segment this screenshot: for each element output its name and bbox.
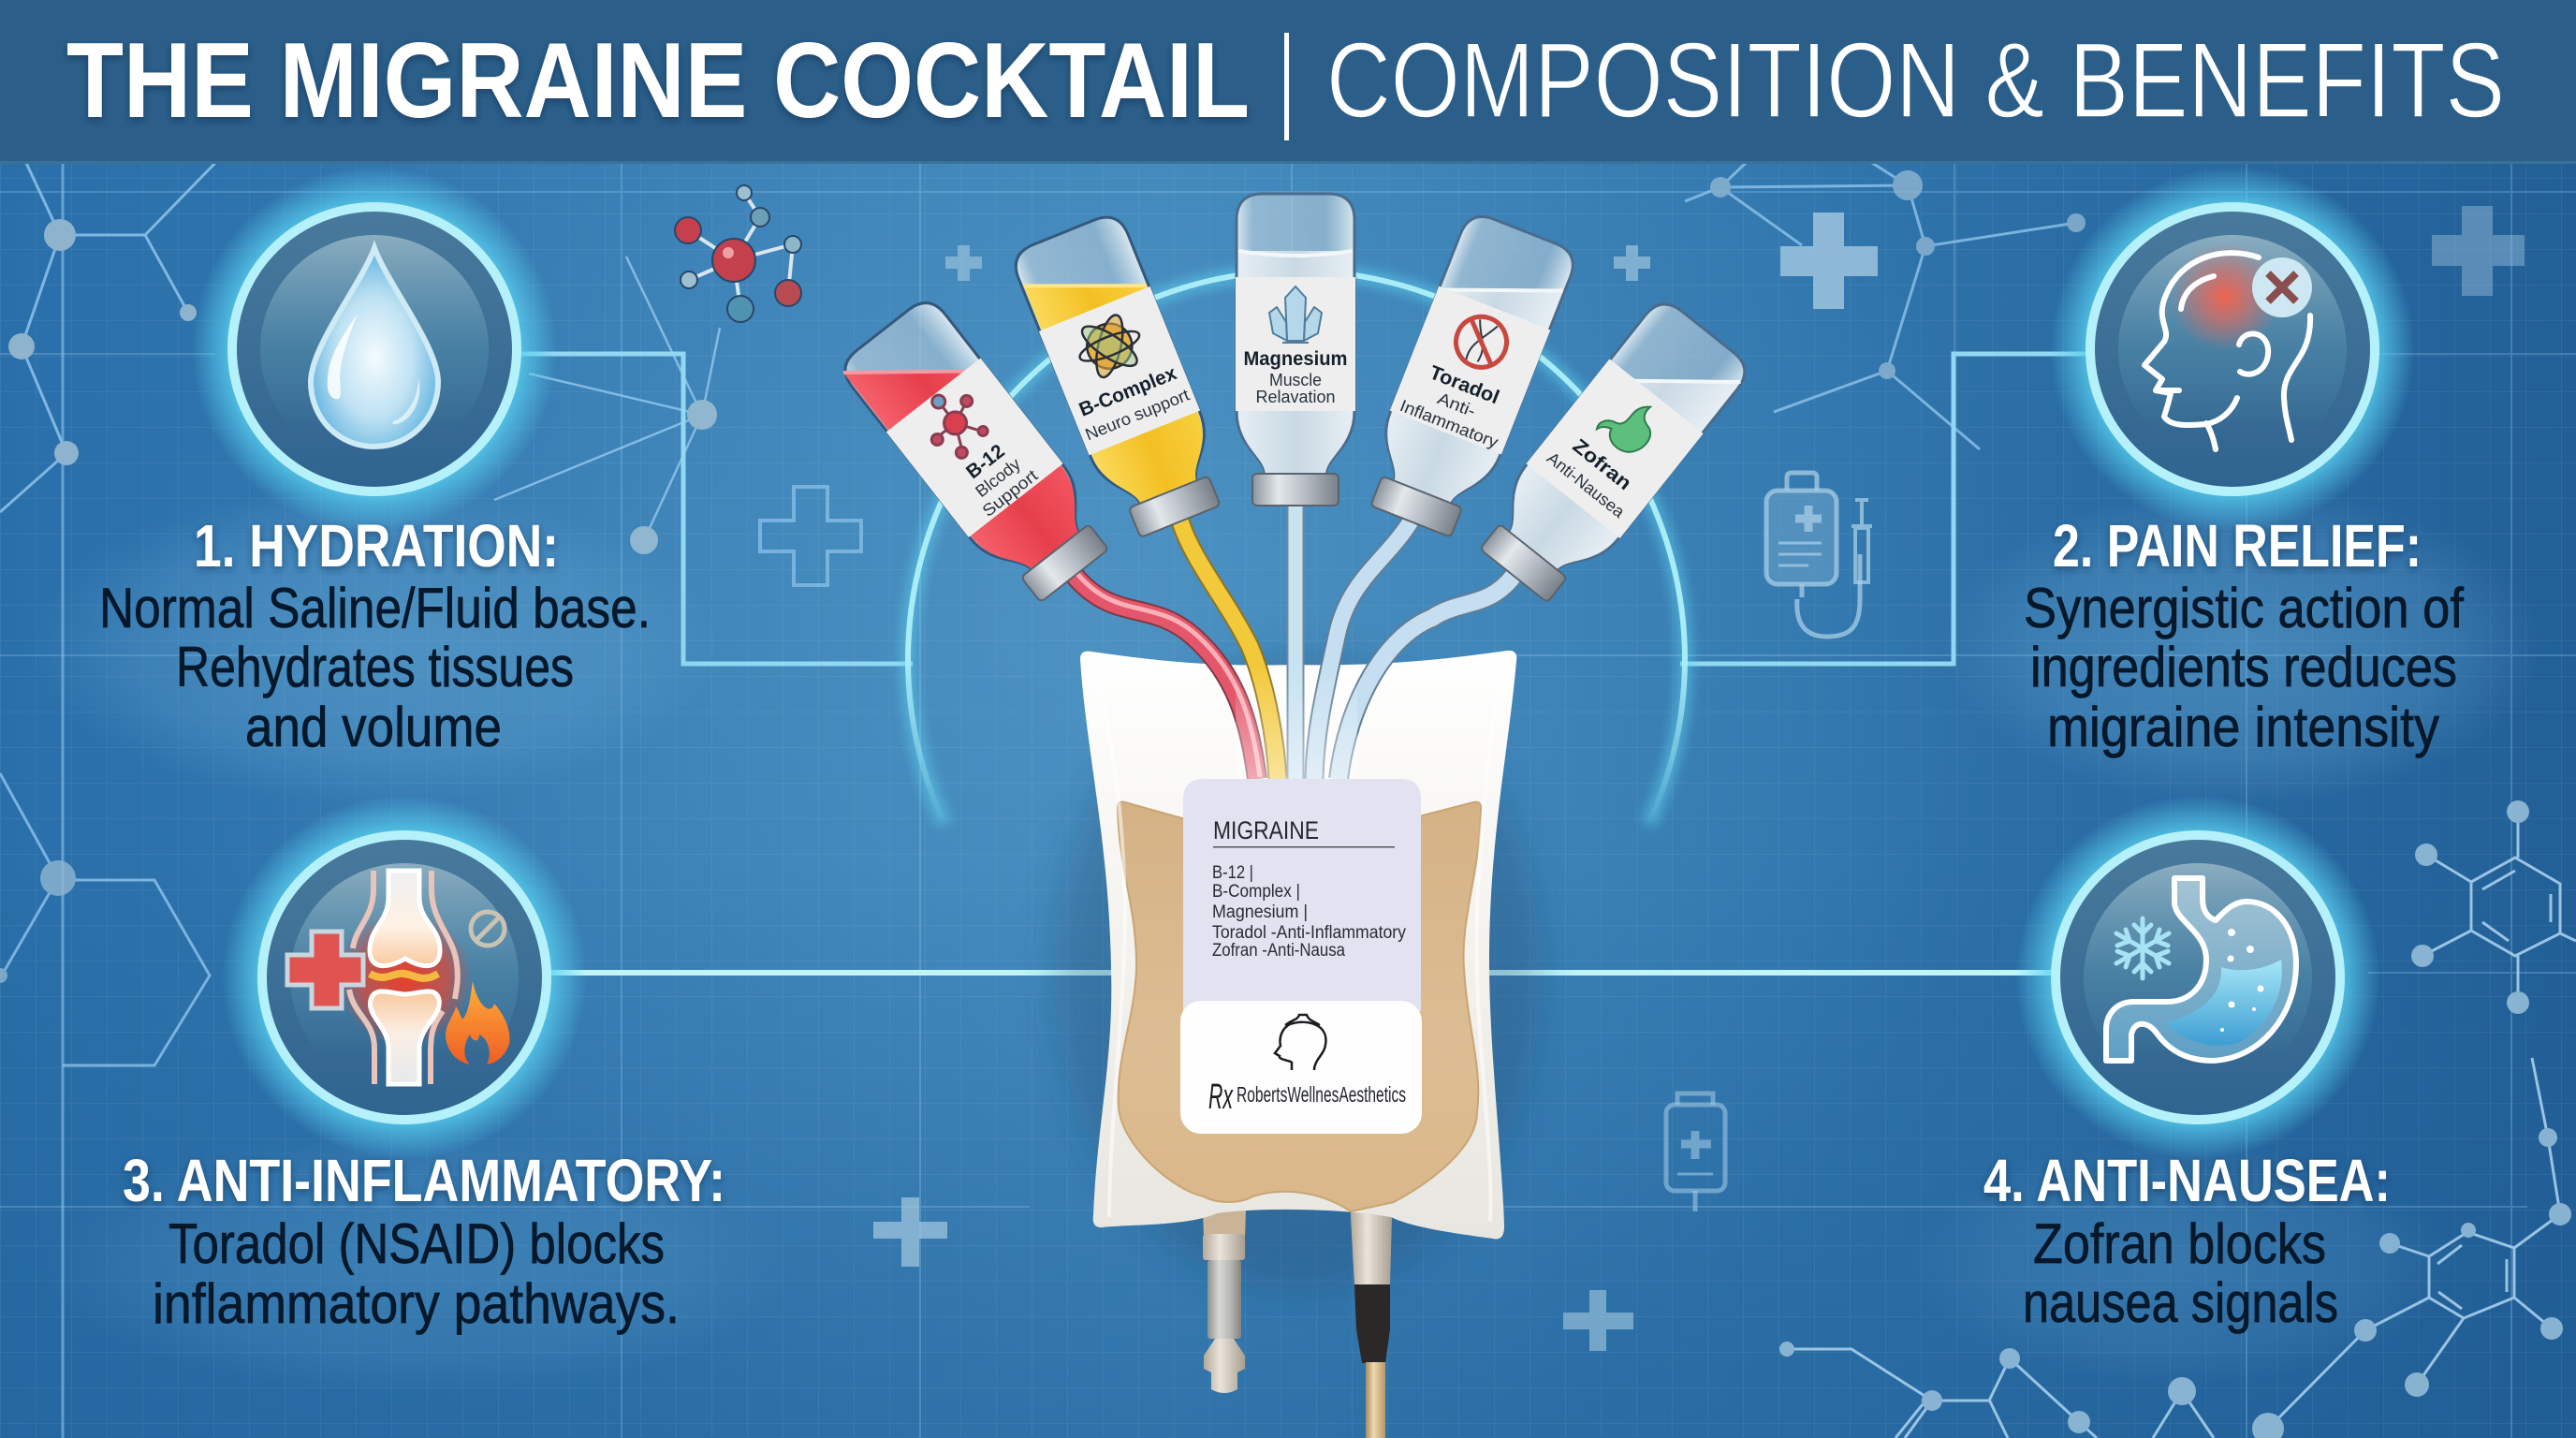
title [66,22,2505,140]
vial: toradol: Anti- [1435,389,1478,420]
label: composition: Toradol -Anti-Inflammatory [1212,923,1406,943]
bag ports [1202,1180,1392,1438]
tube veil inside bag [1236,667,1357,781]
icon: red molecule [911,379,998,467]
text: pain relief body: ingredients reduces [2030,636,2457,698]
text: hydration body [99,577,651,758]
text: pain relief body: Synergistic action of [2024,577,2464,639]
vial: b-12: B-12 [962,440,1009,483]
vial: b-12: Support [979,466,1041,521]
vial: zofran: Zofran [1569,435,1635,494]
text: anti-nausea body: nausea signals [2023,1271,2338,1334]
vial: magnesium [1236,194,1355,506]
vial: b-complex: Neuro support [1082,386,1192,444]
heading: hydration: 1. HYDRATION: [194,512,559,580]
panel: pain relief [2024,167,2464,758]
text: anti-inflammatory body: Toradol (NSAID) blocks [168,1212,665,1275]
panel: anti-nausea [1983,795,2391,1334]
label: composition: B-Complex | [1212,882,1300,902]
label: brand [1180,1001,1422,1134]
connector lines [521,354,2090,973]
label: composition: Zofran -Anti-Nausa [1212,941,1345,961]
icon: head outline [1275,1015,1325,1070]
icon: atom [1068,304,1151,389]
title: THE MIGRAINE COCKTAIL [66,22,1250,140]
icon: stomach with snowflake [2015,795,2380,1160]
tube: zofran clear [1339,576,1514,779]
label: composition: MIGRAINE [1213,816,1319,844]
tube: b-12 red [1075,574,1260,779]
vial: zofran: Anti-Nausea [1544,448,1629,522]
text: hydration body: Rehydrates tissues [176,636,574,698]
vial: magnesium: Magnesium [1243,348,1348,370]
text halos [28,487,2541,1395]
bag body [1080,651,1516,1239]
icon: crystal [1269,286,1322,343]
vial: magnesium: Muscle [1269,371,1322,389]
icon: molecule [675,185,801,322]
icon: small iv bottle [1666,1093,1725,1211]
text: hydration body: and volume [245,696,502,758]
central glow arc [908,271,1685,824]
label: brand: RobertsWellnesAesthetics [1237,1082,1406,1107]
text: anti-inflammatory body [153,1212,680,1335]
icon: no inflammation sign [1448,309,1515,374]
label: brand: Rx [1208,1078,1234,1117]
tube: toradol clear [1314,521,1411,779]
plus symbols [760,206,2525,1351]
panel: hydration [99,167,651,758]
icon: iv bag with syringe [1766,473,1872,637]
vial: b-complex [1008,210,1236,544]
text: pain relief body: migraine intensity [2047,696,2439,758]
text: anti-nausea body: Zofran blocks [2033,1212,2326,1275]
label: composition [1183,779,1421,1011]
tube: b-complex yellow [1180,521,1278,779]
text: anti-nausea body [2023,1212,2338,1334]
network decoration top right [1685,163,2086,449]
tube: magnesium clear [1286,506,1305,779]
text: hydration body: Normal Saline/Fluid base. [99,577,651,639]
vial: toradol: Toradol [1427,361,1502,408]
iv bag label [1180,779,1422,1134]
heading: pain relief: 2. PAIN RELIEF: [2053,512,2422,580]
text: pain relief body [2024,577,2464,758]
header bar [0,0,2576,164]
vial: magnesium: Relavation [1256,388,1335,406]
heading: anti-nausea: 4. ANTI-NAUSEA: [1983,1147,2391,1214]
heading: anti-inflammatory: 3. ANTI-INFLAMMATORY: [123,1147,725,1214]
vial: b-12 [836,293,1121,612]
icon: water drop [192,167,557,532]
bag fluid [1118,802,1481,1211]
vial: toradol [1354,210,1581,543]
vial: zofran [1467,295,1754,613]
icon: head with pain [2050,167,2415,532]
vial: b-12: Blcody [972,454,1024,501]
icon: green stomach [1595,389,1665,461]
text: anti-inflammatory body: inflammatory pathways. [153,1272,680,1335]
iv bag [1055,651,1542,1438]
iv tubes [1075,506,1514,781]
hexagon decoration left [0,773,210,1065]
label: composition: Magnesium | [1212,902,1308,922]
vial: b-complex: B-Complex [1076,362,1180,421]
network decoration top left [0,163,720,1438]
icon: inflamed joint [222,795,587,1160]
molecule decoration right [1779,800,2576,1438]
panel: anti-inflammatory [123,795,725,1335]
vial: toradol: Inflammatory [1398,396,1500,451]
label: composition: B-12 | [1212,863,1253,883]
